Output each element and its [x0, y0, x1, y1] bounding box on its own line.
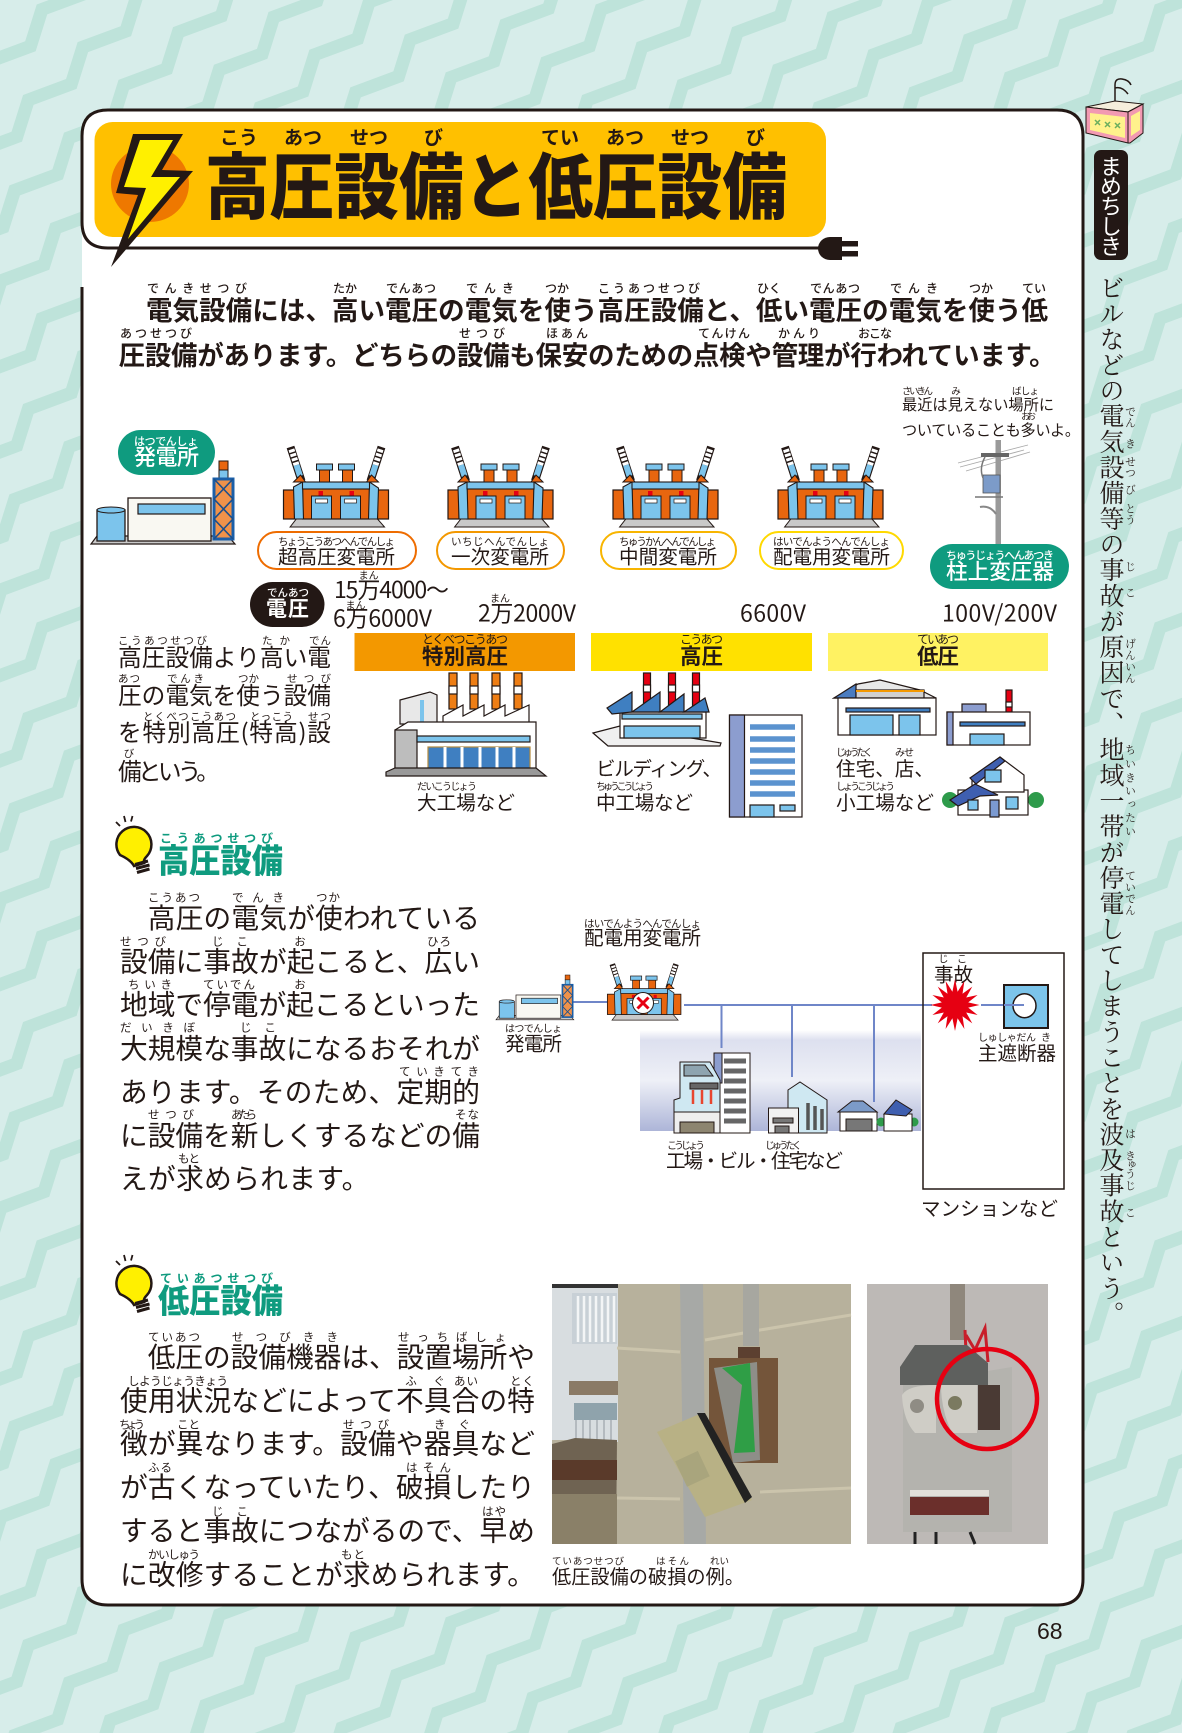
body text: high voltage: せつび	[120, 933, 166, 949]
note: hidden installations	[902, 384, 1080, 440]
note: hidden installations: ついていることも多いよ。	[902, 418, 1080, 440]
level bar: 高圧	[591, 630, 812, 671]
body text: low voltage: すると事故につながるので、早め	[120, 1508, 535, 1548]
vertical furigana: こ	[1122, 1207, 1138, 1218]
body text: low voltage: が古くなっていたり、破損したり	[120, 1465, 535, 1505]
level bar: 低圧	[828, 630, 1048, 671]
voltage values: 6600V	[740, 595, 807, 629]
level bar: 低圧: 低圧	[917, 640, 959, 671]
label: 一次変電所: 一次変電所	[451, 540, 549, 570]
wires: blue power lines	[574, 1002, 1024, 1102]
text: special high voltage explanation: せつ	[308, 709, 331, 724]
section: high voltage heading with bulb	[116, 816, 151, 872]
intro text: ひく	[757, 280, 781, 296]
vertical furigana: とう	[1122, 503, 1138, 525]
page number: 68	[1037, 1618, 1063, 1644]
vertical furigana: じ	[1122, 1180, 1138, 1191]
intro text: かんり	[778, 324, 820, 342]
icon: small power plant	[496, 975, 574, 1020]
caption: 低圧設備の破損の例: れい	[710, 1554, 729, 1568]
text: special high voltage explanation: び	[124, 746, 135, 761]
text: special high voltage explanation: でんき	[167, 671, 204, 686]
icon: lightning bolt	[111, 134, 193, 267]
title furigana: あつ	[606, 123, 644, 150]
body text: high voltage: つか	[316, 889, 340, 905]
icon: lantern	[1086, 79, 1143, 143]
level bar: 特別高圧	[354, 630, 575, 671]
body text: high voltage: 高圧の電気が使われている	[148, 896, 480, 936]
text: special high voltage explanation: 備という。	[118, 753, 220, 787]
icon: house	[942, 757, 1044, 817]
icon: orange sun behind lightning	[111, 146, 189, 222]
label: 事故: じ	[938, 950, 948, 966]
body text: low voltage	[119, 1329, 535, 1592]
intro text: たか	[333, 280, 357, 296]
vertical furigana: き	[1122, 438, 1138, 449]
photo: broken switch box on block wall	[552, 1284, 851, 1544]
icon: mid buildings	[768, 1082, 827, 1133]
section: low voltage heading with bulb	[116, 1255, 151, 1312]
intro text: つか	[545, 280, 569, 296]
body text: low voltage: ていあつ	[148, 1329, 200, 1345]
intro text: おこな	[858, 324, 892, 342]
text: special high voltage explanation: せつび	[287, 671, 332, 686]
text: special high voltage explanation: とっこう	[250, 709, 293, 724]
caption: 低圧設備の破損の例: はそん	[656, 1554, 689, 1568]
label: 中間変電所	[601, 532, 736, 570]
title furigana: あつ	[284, 123, 322, 150]
body text: high voltage: もと	[178, 1150, 200, 1166]
diagram: distribution accident	[496, 916, 1064, 1221]
label: 住宅、店、小工場など	[836, 744, 934, 816]
text: special high voltage explanation: でん	[309, 633, 331, 648]
intro text: でんき	[890, 280, 938, 296]
text: special high voltage explanation	[118, 633, 332, 787]
title furigana: せつ	[671, 123, 709, 150]
label: 住宅、店、小工場など: 小工場など	[836, 786, 934, 816]
text: special high voltage explanation: を特別高圧(特高)設	[118, 714, 331, 748]
chart area: sky gradient behind buildings	[640, 1030, 921, 1131]
body text: low voltage: あい	[454, 1373, 478, 1389]
label: 住宅、店、小工場など: みせ	[895, 744, 914, 759]
voltage values	[333, 567, 1058, 634]
body text: low voltage: せつびきき	[232, 1329, 338, 1345]
text: special high voltage explanation: 圧の電気を使う設備	[118, 677, 331, 711]
icon: mid factory	[593, 673, 721, 746]
voltage values: まん	[346, 597, 366, 612]
icon: small substation with failure mark	[607, 964, 681, 1020]
voltage values: 6万6000V	[333, 600, 433, 634]
icon: utility pole with transformer	[958, 440, 1030, 544]
intro text: せつび	[459, 324, 505, 342]
heading: 低圧設備: ていあつせつび	[160, 1270, 273, 1286]
vertical furigana: こ	[1122, 587, 1138, 598]
intro text: てい	[1022, 280, 1046, 296]
body text: low voltage: はそん	[406, 1459, 451, 1475]
body text: high voltage: でんき	[232, 889, 284, 905]
voltage values: 100V/200V	[942, 595, 1058, 629]
text: special high voltage explanation: つか	[238, 671, 260, 686]
body text: low voltage: きぐ	[434, 1416, 470, 1432]
heading: 高圧設備: 高圧設備	[158, 834, 283, 882]
intro text: でんきせつび	[147, 280, 247, 296]
label: 一次変電所: いちじへんでんしょ	[451, 534, 549, 549]
title furigana: び	[746, 123, 765, 150]
title furigana	[220, 123, 765, 150]
intro text: でんき	[466, 280, 514, 296]
note: hidden installations: み	[951, 384, 961, 398]
body text: high voltage: お	[294, 976, 306, 992]
label: 一次変電所	[437, 532, 564, 570]
body text: low voltage: とく	[510, 1373, 534, 1389]
label: 柱上変圧器 pill: ちゅうじょうへんあつき	[946, 547, 1054, 563]
voltage values: 2万2000V	[478, 595, 577, 629]
body text: low voltage: ちょう	[119, 1416, 145, 1432]
label: マンションなど: マンションなど	[921, 1192, 1058, 1221]
label: 柱上変圧器 pill: 柱上変圧器	[946, 555, 1054, 586]
body text: low voltage: ふ	[405, 1373, 417, 1389]
vertical furigana: び	[1122, 484, 1138, 495]
intro text: ほあん	[546, 324, 588, 342]
note: hidden installations: さいきん	[902, 384, 933, 398]
label: 発電所 pill: はつでんしょ	[134, 433, 198, 449]
body text: high voltage: ちいき	[128, 976, 172, 992]
caption: 低圧設備の破損の例: ていあつせつび	[552, 1554, 624, 1568]
body text: low voltage: もと	[341, 1546, 365, 1562]
label: 電圧 badge: 電圧	[266, 593, 309, 623]
label: 電圧 badge	[250, 582, 324, 627]
text: special high voltage explanation: とくべつこうあつ	[143, 709, 236, 724]
heading: 低圧設備: 低圧設備	[158, 1274, 283, 1322]
body text: low voltage: こと	[177, 1416, 200, 1432]
label: 事故: こ	[957, 950, 967, 966]
title furigana: び	[424, 123, 443, 150]
body text: high voltage	[120, 889, 480, 1196]
vertical furigana: きゅう	[1122, 1150, 1138, 1177]
label: 主遮断器: しゅしゃだん	[978, 1029, 1036, 1044]
note: hidden installations: おお	[1021, 409, 1036, 423]
icon: small store and house	[838, 1100, 918, 1131]
intro text	[119, 280, 1056, 373]
vertical furigana: げんいん	[1122, 638, 1138, 684]
label: ビルディング、中工場など: ちゅうこうじょう	[596, 778, 654, 793]
label: ビルディング、中工場など	[596, 752, 722, 816]
level bar: 低圧: ていあつ	[917, 630, 959, 648]
title furigana: こう	[220, 123, 258, 150]
body text: high voltage: 設備に事故が起こると、広い	[120, 940, 480, 980]
icon: tall buildings cluster	[674, 1053, 750, 1133]
text: special high voltage explanation: たか	[262, 633, 290, 648]
label: 大工場など: だいこうじょう	[417, 778, 477, 793]
label: 配電用変電所: はいでんようへんでんしょ	[584, 916, 701, 931]
vertical furigana: ちいき	[1122, 744, 1138, 786]
body text: high voltage: そな	[455, 1106, 479, 1122]
level bar: 特別高圧: とくべつこうあつ	[422, 630, 508, 648]
intro text: 電気設備には、高い電圧の電気を使う高圧設備と、低い電圧の電気を使う低	[146, 289, 1048, 328]
body text: high voltage: こうあつ	[148, 889, 200, 905]
label: 超高圧変電所: 超高圧変電所	[278, 540, 395, 570]
intro text: でんあつ	[810, 280, 860, 296]
level bar: 高圧: こうあつ	[680, 630, 723, 648]
label: 事故: 事故	[934, 958, 973, 987]
label: 工場・ビル・住宅など: こうじょう	[667, 1137, 705, 1152]
box: mansion outline	[923, 953, 1064, 1189]
vertical furigana: は	[1122, 1128, 1138, 1139]
level bar: 高圧: 高圧	[680, 640, 723, 671]
icon: red starburst	[930, 979, 980, 1031]
vertical furigana: じ	[1122, 561, 1138, 572]
body text: low voltage: に改修することが求められます。	[120, 1552, 535, 1592]
label: 中間変電所: 中間変電所	[619, 540, 717, 570]
label: 工場・ビル・住宅など: 工場・ビル・住宅など	[666, 1144, 843, 1173]
label: 発電所 pill: 発電所	[134, 440, 199, 472]
icon: office building	[730, 715, 802, 817]
label: 発電所 pill	[118, 430, 215, 475]
body text: low voltage: せっちばしょ	[398, 1329, 506, 1345]
label: 超高圧変電所: ちょうこうあつへんでんしょ	[278, 534, 395, 549]
body text: low voltage: じこ	[212, 1503, 248, 1519]
text: special high voltage explanation: あつ	[118, 671, 140, 686]
icon: power plant	[91, 461, 235, 544]
icon: power plug	[818, 237, 858, 260]
label: 主遮断器: 主遮断器	[978, 1037, 1056, 1066]
label: 配電用変電所: はいでんようへんでんしょ	[773, 534, 890, 549]
label: ビルディング、中工場など: 中工場など	[596, 786, 693, 816]
label: 配電用変電所: 配電用変電所	[773, 540, 890, 570]
label: 発電所: はつでんしょ	[505, 1020, 562, 1035]
body text: low voltage: はや	[482, 1503, 506, 1519]
body text: high voltage: ひろ	[427, 933, 451, 949]
heading: 高圧設備: こうあつせつび	[160, 830, 273, 846]
body text: high voltage: に設備を新しくするなどの備	[120, 1114, 480, 1154]
panel: white main card	[82, 110, 1083, 1605]
body text: high voltage: 地域で停電が起こるといった	[120, 982, 480, 1022]
label: 工場・ビル・住宅など: じゅうたく	[765, 1137, 802, 1152]
title band	[94, 122, 826, 237]
body text: low voltage: 徴が異なります。設備や器具など	[120, 1422, 535, 1462]
body text: high voltage: あたら	[231, 1106, 257, 1122]
vertical furigana: ていでん	[1122, 870, 1138, 916]
voltage values: まん	[490, 590, 510, 605]
note: hidden installations: ばしょ	[1012, 384, 1039, 398]
note: hidden installations: 最近は見えない場所に	[902, 393, 1054, 415]
level bar: 特別高圧: 特別高圧	[422, 640, 508, 671]
vertical furigana: でん	[1122, 406, 1138, 428]
body text: high voltage: せつび	[148, 1106, 194, 1122]
label: 発電所: 発電所	[505, 1028, 562, 1056]
intro text: 圧設備があります。どちらの設備も保安のための点検や管理が行われています。	[119, 334, 1056, 373]
label: 超高圧変電所	[258, 532, 416, 570]
intro text: でんあつ	[386, 280, 436, 296]
icon: substation 1	[284, 447, 388, 527]
vertical text: trivia: ビルなどの電気設備等の事故が原因で、地域一帯が停電してしまうことを波及事故という。	[1094, 275, 1130, 1327]
label: 主遮断器: き	[1041, 1029, 1051, 1044]
label: 住宅、店、小工場など: じゅうたく	[836, 744, 873, 759]
icon: main breaker	[1004, 985, 1048, 1028]
tab: まめちしき: まめちしき	[1095, 155, 1127, 255]
body text: high voltage: 大規模な事故になるおそれが	[120, 1026, 480, 1066]
icon: substation 2	[448, 447, 553, 527]
title text: 高圧設備と低圧設備	[205, 129, 787, 234]
label: 配電用変電所	[760, 532, 903, 570]
label: 柱上変圧器 pill	[930, 544, 1069, 589]
title furigana: てい	[541, 123, 579, 150]
body text: low voltage: 使用状況などによって不具合の特	[120, 1378, 535, 1418]
body text: high voltage: ていきてき	[399, 1063, 479, 1079]
label: 住宅、店、小工場など: 住宅、店、	[836, 752, 934, 782]
photo: damaged breaker with red circle	[867, 1284, 1048, 1544]
body text: low voltage: せつび	[343, 1416, 390, 1432]
text: special high voltage explanation: 高圧設備より高い電	[118, 639, 331, 673]
body text: low voltage: しようじょうきょう	[128, 1373, 228, 1389]
label: 住宅、店、小工場など: しょうこうじょう	[836, 778, 895, 793]
voltage values: 15万4000～	[334, 571, 449, 605]
voltage values: まん	[359, 567, 379, 582]
intro text: こうあつせつび	[598, 280, 700, 296]
caption: 低圧設備の破損の例: 低圧設備の破損の例。	[552, 1561, 744, 1589]
label: ビルディング、中工場など: ビルディング、	[596, 752, 722, 782]
label: 電圧 badge: でんあつ	[267, 585, 309, 600]
vertical furigana	[1122, 406, 1138, 1218]
body text: low voltage: かいしゅう	[148, 1546, 200, 1562]
body text: high voltage: ていでん	[203, 976, 255, 992]
body text: high voltage: じこ	[212, 933, 248, 949]
body text: high voltage: じこ	[240, 1019, 276, 1035]
body text: high voltage: お	[294, 933, 306, 949]
icon: substation 4	[778, 447, 883, 527]
body text: low voltage: ふる	[148, 1459, 172, 1475]
icon: convenience store	[834, 680, 936, 735]
body text: high voltage: えが求められます。	[120, 1156, 369, 1196]
label: 中間変電所: ちゅうかんへんでんしょ	[619, 534, 716, 549]
icon: large factory	[386, 673, 546, 776]
body text: high voltage: だいきぼ	[120, 1019, 196, 1035]
intro text: てんけん	[698, 324, 750, 342]
intro text: つか	[969, 280, 993, 296]
vertical furigana: いったい	[1122, 785, 1138, 839]
vertical furigana: せつ	[1122, 456, 1138, 478]
title furigana: せつ	[350, 123, 388, 150]
body text: high voltage: あります。そのため、定期的	[120, 1070, 480, 1110]
body text: low voltage: 低圧の設備機器は、設置場所や	[148, 1335, 535, 1375]
icon: substation 3	[613, 447, 718, 527]
icon: small factory	[947, 690, 1030, 745]
text: special high voltage explanation: こうあつせつび	[118, 633, 208, 648]
label: 配電用変電所: 配電用変電所	[584, 922, 701, 950]
body text: low voltage: ぐ	[433, 1373, 445, 1389]
intro text: あつせつび	[120, 324, 192, 342]
label: 大工場など: 大工場など	[417, 786, 515, 816]
